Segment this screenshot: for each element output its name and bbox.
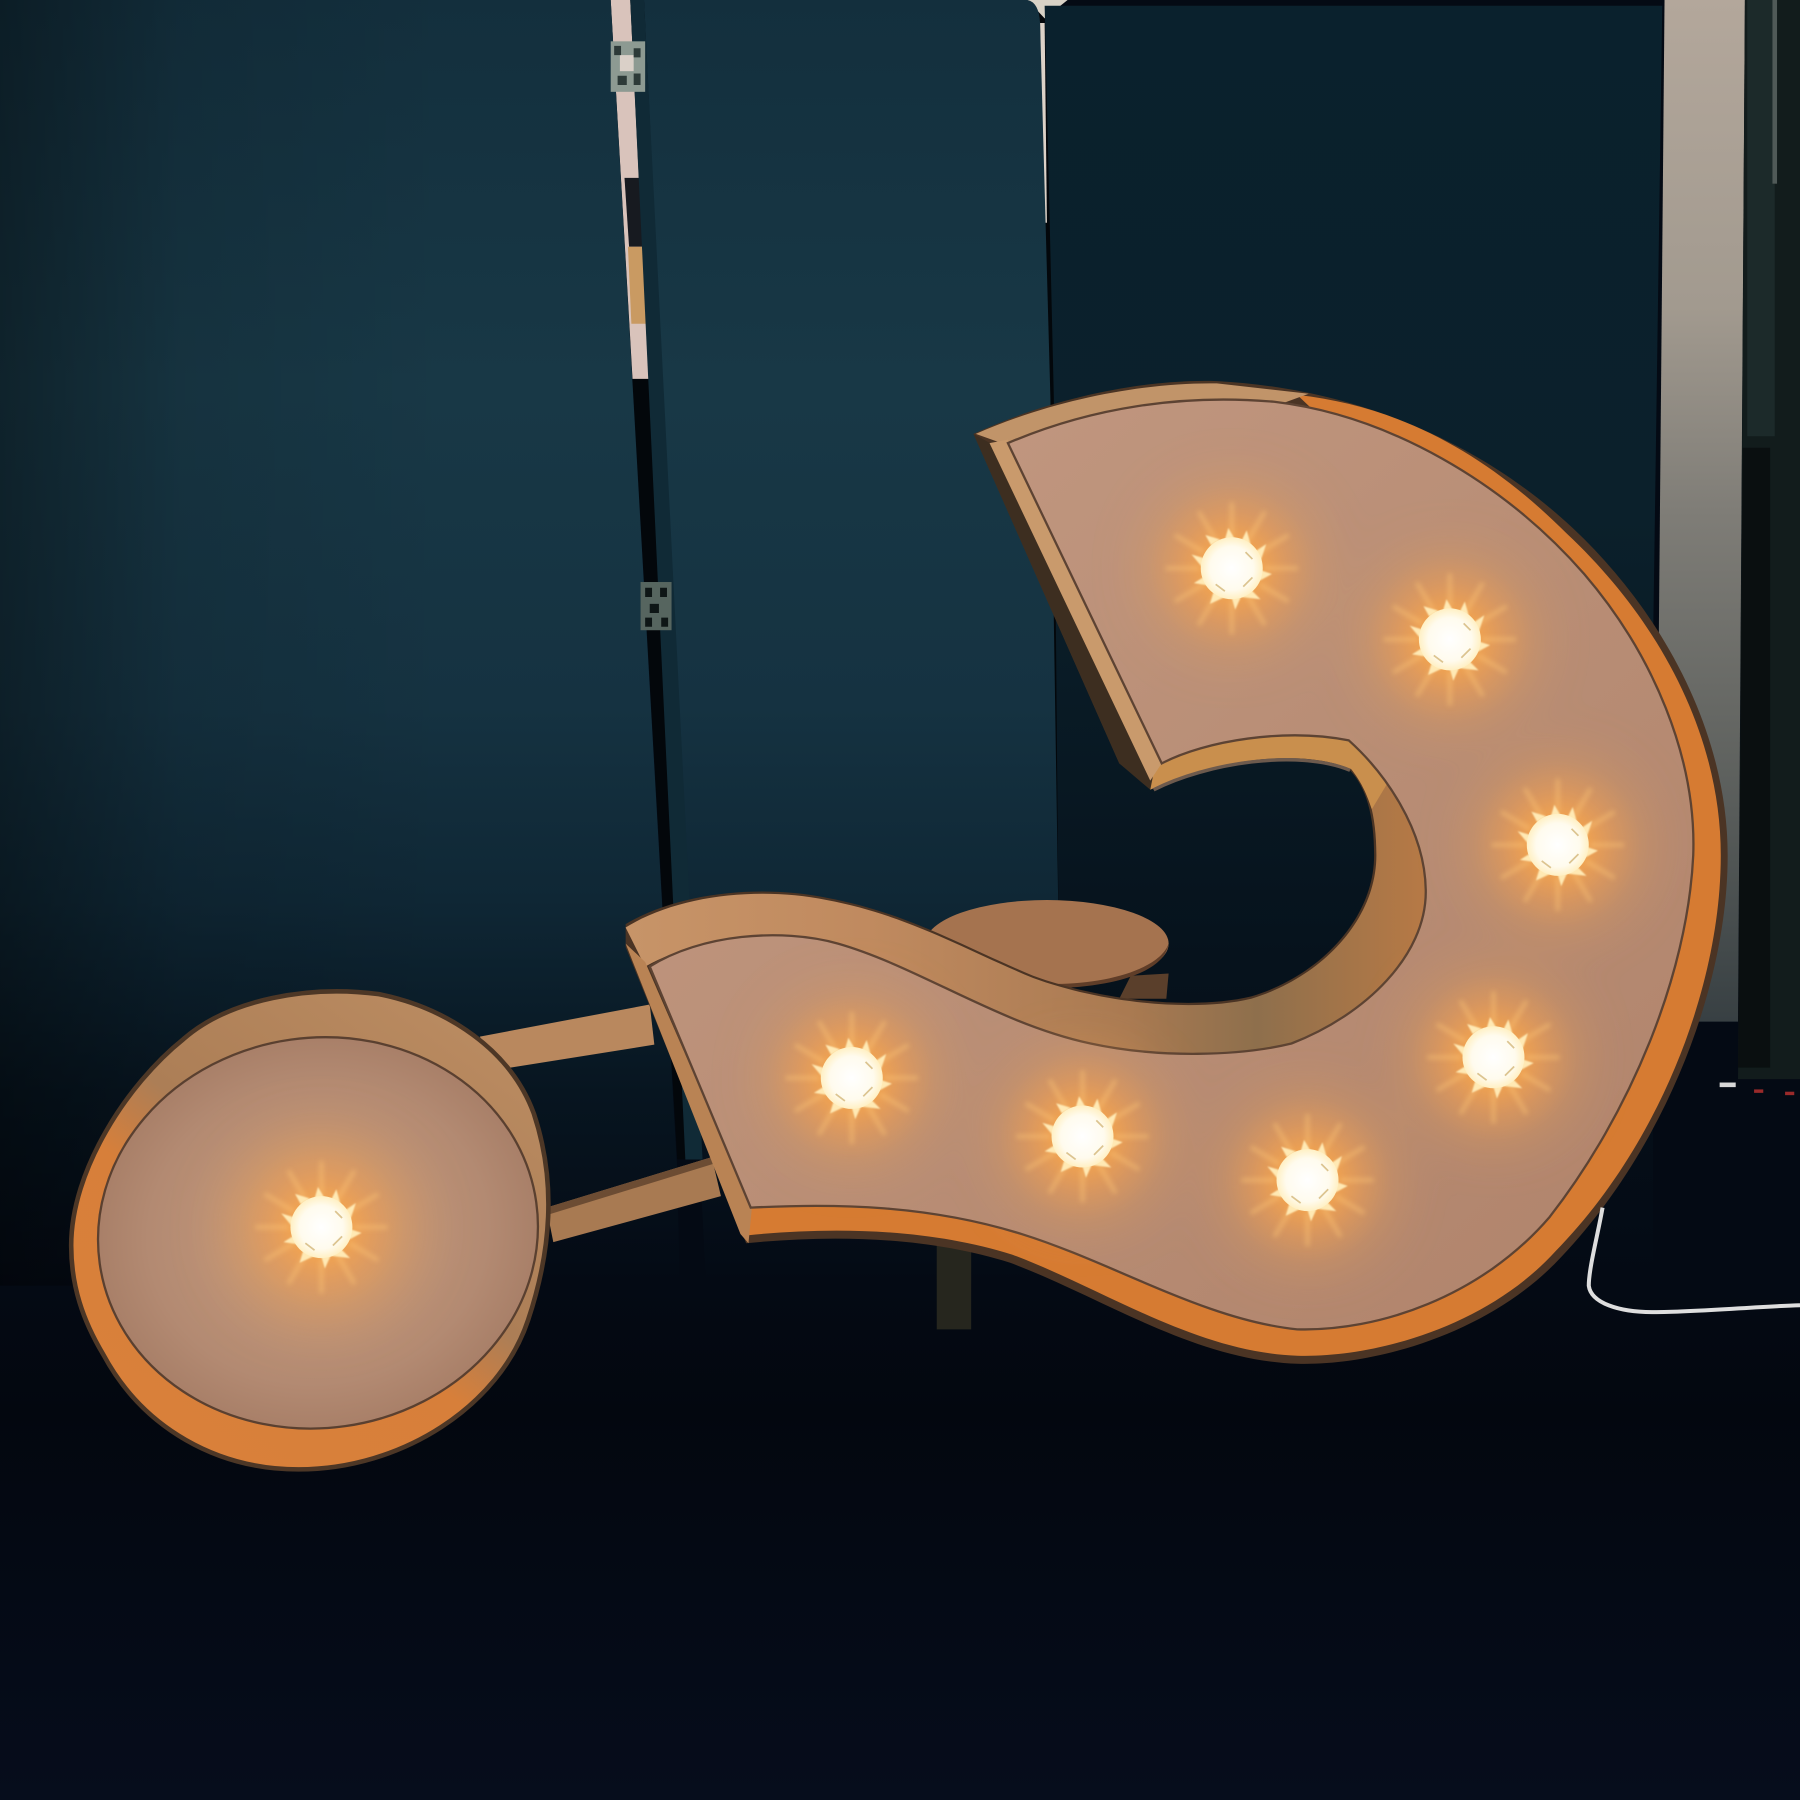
orange inner wall — [735, 395, 1721, 1356]
wall above the wave — [626, 735, 1435, 1058]
pale face of sign — [650, 400, 1693, 1329]
panel: dark door frame — [1738, 0, 1800, 1079]
icon: lower hinge — [641, 582, 672, 630]
end cut of lower tail — [626, 944, 752, 1243]
bulb 2 — [1367, 557, 1533, 722]
panel: middle screen leaf — [644, 0, 1058, 1286]
panel: pale backing strip — [1655, 0, 1745, 1022]
panel: gap behind screen — [611, 0, 1068, 1159]
wooden struts joining dot and sign — [480, 1004, 721, 1242]
power cable — [1589, 1208, 1800, 1312]
wall above the hole — [1142, 727, 1389, 809]
panel: right screen leaf — [1045, 6, 1662, 1286]
small red indicator lights — [1720, 1083, 1794, 1095]
bulb 1 — [1149, 486, 1314, 651]
bulb 8 — [239, 1145, 404, 1310]
floor — [0, 1283, 1800, 1800]
bulb 6 — [1000, 1054, 1165, 1219]
bulb 4 — [1411, 975, 1576, 1140]
tan top rim — [976, 383, 1309, 445]
warm spill — [232, 1138, 411, 1317]
dot face — [73, 1009, 563, 1457]
dot body — [71, 991, 548, 1469]
bulb 3 — [1475, 762, 1640, 928]
stool behind the sign — [925, 900, 1169, 1329]
warm spill around bulbs — [774, 490, 1636, 1258]
question mark sign — [626, 381, 1728, 1364]
panel: left screen leaf — [0, 0, 680, 1286]
sign body silhouette — [626, 381, 1728, 1364]
question mark dot — [71, 991, 563, 1469]
icon: upper hinge — [611, 41, 645, 92]
bulb 5 — [1225, 1097, 1390, 1263]
bulb 7 — [769, 995, 934, 1161]
panel: folded edge of middle leaf — [630, 0, 703, 1159]
dark end cut of upper tip — [973, 434, 1155, 790]
